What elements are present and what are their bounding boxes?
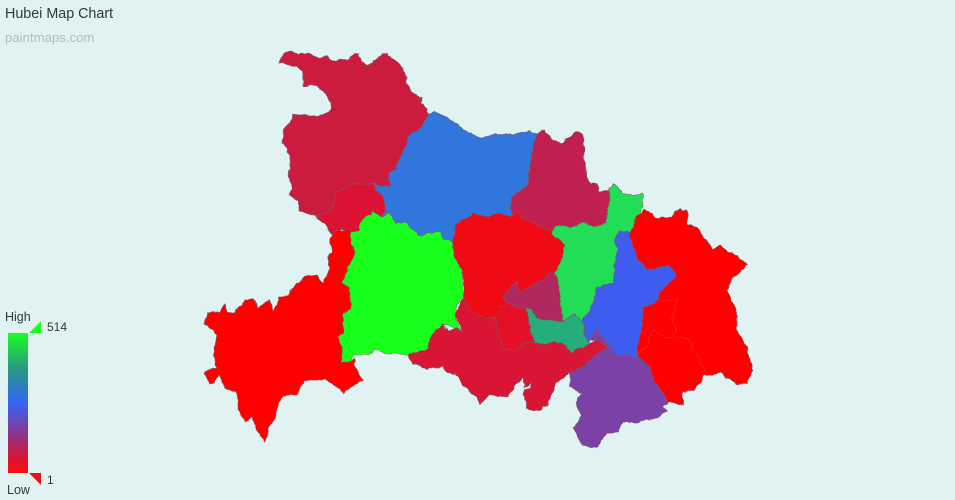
source label: paintmaps.com <box>5 30 94 45</box>
legend low label: Low <box>7 483 31 497</box>
legend low marker <box>29 473 41 485</box>
legend colour bar <box>8 333 28 473</box>
region: teal <box>527 309 588 352</box>
region: northwest crimson <box>279 50 430 217</box>
region: bright green <box>338 211 464 363</box>
region: east red <box>630 208 752 405</box>
region: purple <box>570 331 668 448</box>
region: small crimson north of green <box>315 184 386 237</box>
region: maroon <box>502 273 563 322</box>
legend high marker <box>29 321 41 333</box>
region: green <box>552 184 642 322</box>
legend <box>5 310 67 497</box>
legend min value: 1 <box>47 473 54 487</box>
legend high label: High <box>5 310 31 324</box>
region: central red <box>452 210 565 318</box>
region: small red <box>495 303 535 352</box>
title: Hubei Map Chart <box>5 6 113 22</box>
map of Hubei regions <box>204 50 752 448</box>
region: north crimson <box>511 130 609 232</box>
region: north-central blue <box>372 112 538 242</box>
region: blue <box>582 231 677 358</box>
region: west red <box>204 230 362 442</box>
legend max value: 514 <box>47 320 67 334</box>
region: south crimson <box>408 298 608 412</box>
